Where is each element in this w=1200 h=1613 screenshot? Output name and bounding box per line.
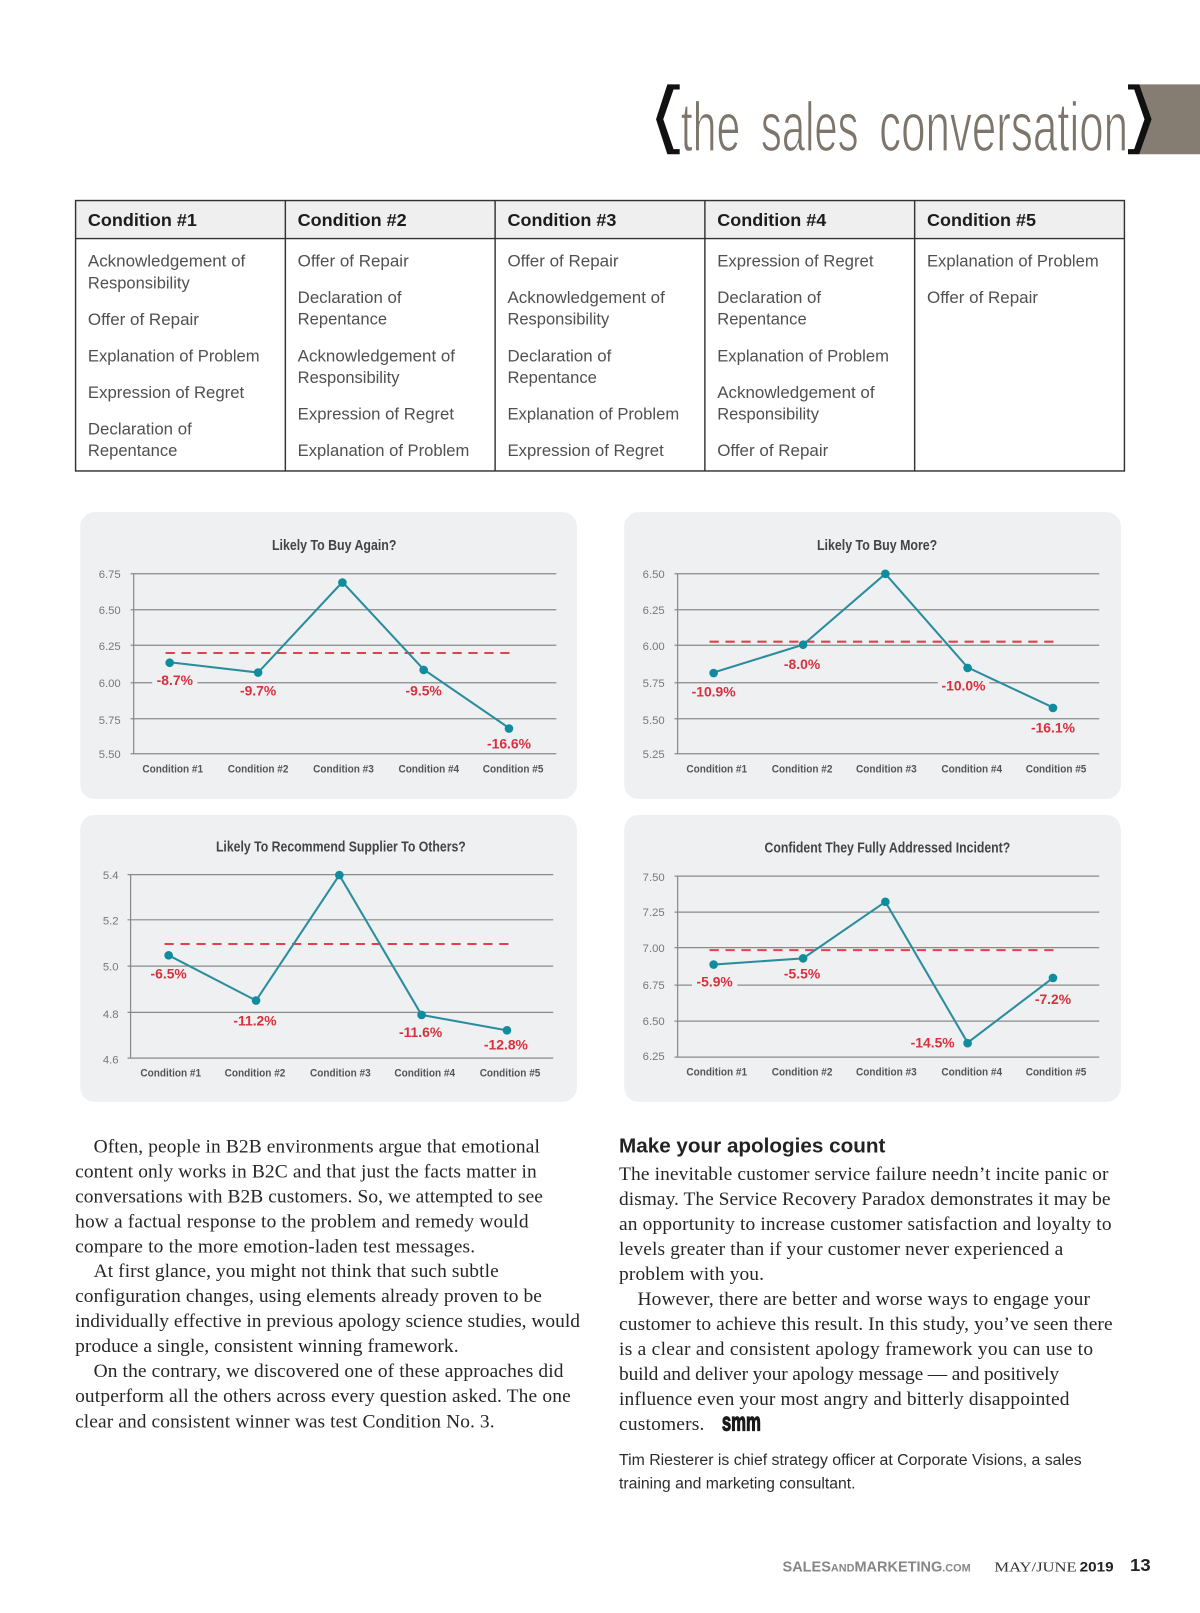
- y axis and grid: 6.25: [643, 605, 665, 617]
- category labels: Condition #3: [310, 1068, 371, 1080]
- text block: right column: The inevitable customer service failure needn’t incite panic or: [619, 1164, 1109, 1185]
- author bio: training and marketing consultant.: [619, 1475, 856, 1492]
- y axis and grid: 5.25: [643, 749, 665, 761]
- icon: left bracket: [656, 84, 680, 154]
- chart: likely to recommend supplier: [80, 815, 577, 1102]
- column: condition 2: Acknowledgement of: [298, 346, 455, 365]
- text block: right column: build and deliver your apology message — and positively: [619, 1364, 1059, 1385]
- title: sales: [761, 88, 859, 166]
- percentage labels: [157, 672, 531, 752]
- chart: likely to buy more: [624, 512, 1121, 799]
- title: [681, 88, 1128, 166]
- column: condition 4: Acknowledgement of: [717, 383, 875, 402]
- chart: likely to recommend supplier: Likely To Recommend Supplier To Others?: [216, 839, 466, 855]
- heading: make your apologies count: Make your apologies count: [619, 1135, 886, 1158]
- y axis and grid: 6.50: [643, 1016, 665, 1028]
- percentage labels: -12.8%: [484, 1036, 528, 1052]
- percentage labels: [151, 965, 528, 1052]
- percentage labels: -9.7%: [240, 683, 276, 699]
- category labels: Condition #5: [483, 763, 543, 775]
- column: condition 2: Condition #2: [298, 210, 407, 230]
- column: condition 3: Expression of Regret: [507, 441, 664, 460]
- text block: left column: At first glance, you might not think that such subtle: [94, 1261, 499, 1282]
- footer: 13: [1130, 1555, 1151, 1575]
- percentage labels: -8.7%: [157, 672, 193, 688]
- text block: right column: customer to achieve this result. In this study, you’ve seen there: [619, 1314, 1113, 1335]
- column: condition 3: Repentance: [507, 368, 597, 387]
- percentage labels: -9.5%: [406, 683, 442, 699]
- percentage labels: -11.6%: [399, 1024, 442, 1040]
- footer: [783, 1555, 1151, 1576]
- column: condition 2: Responsibility: [298, 368, 400, 387]
- column: condition 3: Responsibility: [507, 309, 610, 328]
- y axis and grid: 4.8: [103, 1009, 119, 1021]
- category labels: Condition #3: [856, 1067, 917, 1079]
- column: condition 3: Acknowledgement of: [507, 288, 665, 307]
- y axis and grid: 5.0: [103, 962, 119, 974]
- y axis and grid: [643, 569, 1099, 761]
- percentage labels: -7.2%: [1035, 991, 1071, 1007]
- data line: [709, 569, 1057, 712]
- icon: smm end mark: smm: [722, 1408, 761, 1436]
- text block: left column: compare to the more emotion-laden test messages.: [75, 1236, 475, 1257]
- text block: left column: configuration changes, using elements already proven to be: [75, 1286, 542, 1307]
- column: condition 4: Condition #4: [717, 210, 827, 230]
- column: condition 2: Explanation of Problem: [298, 441, 469, 460]
- text block: left column: On the contrary, we discovered one of these approaches did: [94, 1361, 564, 1382]
- category labels: Condition #2: [772, 1067, 832, 1079]
- category labels: [686, 763, 1086, 775]
- percentage labels: [697, 965, 1071, 1050]
- chart: confident they fully addressed incident: [624, 815, 1121, 1102]
- column: condition 4: Offer of Repair: [717, 441, 829, 460]
- text block: right column: influence even your most angry and bitterly disappointed: [619, 1389, 1070, 1410]
- column: condition 4: Responsibility: [717, 405, 820, 424]
- text block: left column: content only works in B2C and that just the facts matter in: [75, 1161, 537, 1182]
- y axis and grid: 6.25: [99, 641, 121, 653]
- data line: [709, 898, 1057, 1048]
- footer: SALESANDMARKETING.COM: [783, 1560, 971, 1576]
- y axis and grid: 5.75: [643, 678, 665, 690]
- percentage labels: -10.9%: [692, 684, 736, 700]
- column: condition 1: Repentance: [88, 441, 177, 460]
- column: condition 3: Declaration of: [507, 346, 612, 365]
- column: condition 3: [507, 210, 679, 460]
- icon: right bracket: [1128, 84, 1152, 154]
- table header background: [76, 201, 1124, 239]
- category labels: Condition #1: [686, 1067, 747, 1079]
- category labels: Condition #4: [398, 763, 460, 775]
- chart: likely to buy again: Likely To Buy Again?: [272, 538, 396, 554]
- column: condition 1: Expression of Regret: [88, 383, 245, 402]
- text block: left column: how a factual response to the problem and remedy would: [75, 1211, 529, 1232]
- text block: right column: customers.: [619, 1414, 704, 1435]
- column: condition 4: Repentance: [717, 309, 807, 328]
- percentage labels: -16.6%: [487, 736, 531, 752]
- y axis and grid: 6.00: [643, 641, 665, 653]
- column: condition 4: Explanation of Problem: [717, 346, 889, 365]
- category labels: [686, 1067, 1086, 1079]
- y axis and grid: [643, 872, 1099, 1063]
- text block: right column: an opportunity to increase customer satisfaction and loyalty to: [619, 1214, 1112, 1235]
- category labels: Condition #4: [941, 1067, 1003, 1079]
- category labels: [140, 1068, 540, 1080]
- y axis and grid: 5.50: [643, 715, 665, 727]
- percentage labels: -8.0%: [784, 656, 820, 672]
- column: condition 3: Condition #3: [507, 210, 617, 230]
- text block: right column: is a clear and consistent apology framework you can use to: [619, 1339, 1093, 1360]
- category labels: Condition #4: [941, 763, 1003, 775]
- y axis and grid: 6.00: [99, 678, 121, 690]
- percentage labels: -14.5%: [911, 1034, 955, 1050]
- category labels: Condition #2: [228, 763, 288, 775]
- y axis and grid: 6.75: [99, 569, 121, 581]
- text block: left column: clear and consistent winner was test Condition No. 3.: [75, 1411, 495, 1432]
- text block: left column: outperform all the others across every question asked. The one: [75, 1386, 571, 1407]
- table: conditions: [76, 201, 1124, 471]
- text block: left column: [75, 1136, 580, 1432]
- category labels: Condition #1: [686, 763, 747, 775]
- y axis and grid: 5.4: [103, 870, 119, 882]
- column: condition 1: Responsibility: [88, 273, 190, 292]
- footer: 2019: [1080, 1559, 1114, 1575]
- text block: right column: problem with you.: [619, 1264, 764, 1285]
- title: the: [681, 88, 740, 166]
- percentage labels: -5.9%: [697, 974, 733, 990]
- column: condition 2: Declaration of: [298, 288, 402, 307]
- y axis and grid: 7.50: [643, 872, 665, 884]
- chart: confident they fully addressed incident: Confident They Fully Addressed Incident?: [765, 840, 1010, 856]
- y axis and grid: 6.50: [99, 605, 121, 617]
- text block: left column: individually effective in previous apology science studies, would: [75, 1311, 580, 1332]
- column: condition 5: Explanation of Problem: [927, 251, 1099, 270]
- category labels: Condition #3: [856, 763, 917, 775]
- y axis and grid: 5.50: [99, 749, 121, 761]
- text block: right column: dismay. The Service Recovery Paradox demonstrates it may be: [619, 1189, 1111, 1210]
- category labels: Condition #3: [313, 763, 374, 775]
- y axis and grid: 6.25: [643, 1051, 665, 1063]
- column: condition 4: Expression of Regret: [717, 251, 874, 270]
- y axis and grid: 6.50: [643, 569, 665, 581]
- y axis and grid: [103, 870, 553, 1066]
- column: condition 3: Offer of Repair: [507, 251, 619, 270]
- y axis and grid: 5.75: [99, 715, 121, 727]
- text block: left column: conversations with B2B customers. So, we attempted to see: [75, 1186, 543, 1207]
- footer: MAY/JUNE: [994, 1561, 1077, 1576]
- chart: likely to buy again: [80, 512, 577, 799]
- column: condition 5: Condition #5: [927, 210, 1036, 230]
- column: condition 2: Repentance: [298, 309, 387, 328]
- column: condition 1: Acknowledgement of: [88, 251, 246, 270]
- table grid: [76, 201, 1124, 471]
- y axis and grid: 4.6: [103, 1054, 119, 1066]
- author bio: [619, 1452, 1082, 1492]
- column: condition 1: Offer of Repair: [88, 310, 199, 329]
- text block: right column: [619, 1164, 1113, 1435]
- category labels: Condition #5: [1026, 1067, 1086, 1079]
- category labels: [142, 763, 543, 775]
- text block: right column: However, there are better and worse ways to engage your: [638, 1289, 1091, 1310]
- y axis and grid: 7.25: [643, 907, 665, 919]
- y axis and grid: [99, 569, 556, 761]
- column: condition 1: Condition #1: [88, 210, 197, 230]
- y axis and grid: 6.75: [643, 980, 665, 992]
- text block: left column: produce a single, consistent winning framework.: [75, 1336, 459, 1357]
- text block: left column: Often, people in B2B environments argue that emotional: [94, 1136, 540, 1157]
- column: condition 2: Offer of Repair: [298, 251, 409, 270]
- column: condition 2: [298, 210, 469, 460]
- category labels: Condition #1: [142, 763, 203, 775]
- y axis and grid: 7.00: [643, 943, 665, 955]
- percentage labels: -11.2%: [233, 1013, 277, 1029]
- grey header band: [1139, 84, 1200, 154]
- percentage labels: -16.1%: [1031, 720, 1075, 736]
- column: condition 2: Expression of Regret: [298, 405, 454, 424]
- column: condition 4: [717, 210, 889, 460]
- percentage labels: -6.5%: [151, 965, 187, 981]
- column: condition 5: [927, 210, 1099, 307]
- column: condition 1: Explanation of Problem: [88, 346, 260, 365]
- data line: [165, 578, 513, 733]
- chart: likely to buy more: Likely To Buy More?: [817, 538, 937, 554]
- text block: right column: levels greater than if your customer never experienced a: [619, 1239, 1064, 1260]
- category labels: Condition #2: [772, 763, 832, 775]
- author bio: Tim Riesterer is chief strategy officer at Corporate Visions, a sales: [619, 1452, 1082, 1469]
- category labels: Condition #1: [140, 1068, 201, 1080]
- column: condition 1: Declaration of: [88, 419, 192, 438]
- header: the sales conversation: [656, 84, 1200, 166]
- column: condition 1: [88, 210, 260, 460]
- percentage labels: -5.5%: [784, 965, 820, 981]
- category labels: Condition #5: [480, 1068, 540, 1080]
- column: condition 4: Declaration of: [717, 288, 821, 307]
- category labels: Condition #2: [225, 1068, 285, 1080]
- column: condition 5: Offer of Repair: [927, 288, 1038, 307]
- data line: [164, 871, 511, 1035]
- column: condition 3: Explanation of Problem: [507, 405, 679, 424]
- category labels: Condition #4: [394, 1068, 456, 1080]
- category labels: Condition #5: [1026, 763, 1086, 775]
- percentage labels: [692, 656, 1075, 736]
- y axis and grid: 5.2: [103, 915, 119, 927]
- percentage labels: -10.0%: [942, 678, 985, 694]
